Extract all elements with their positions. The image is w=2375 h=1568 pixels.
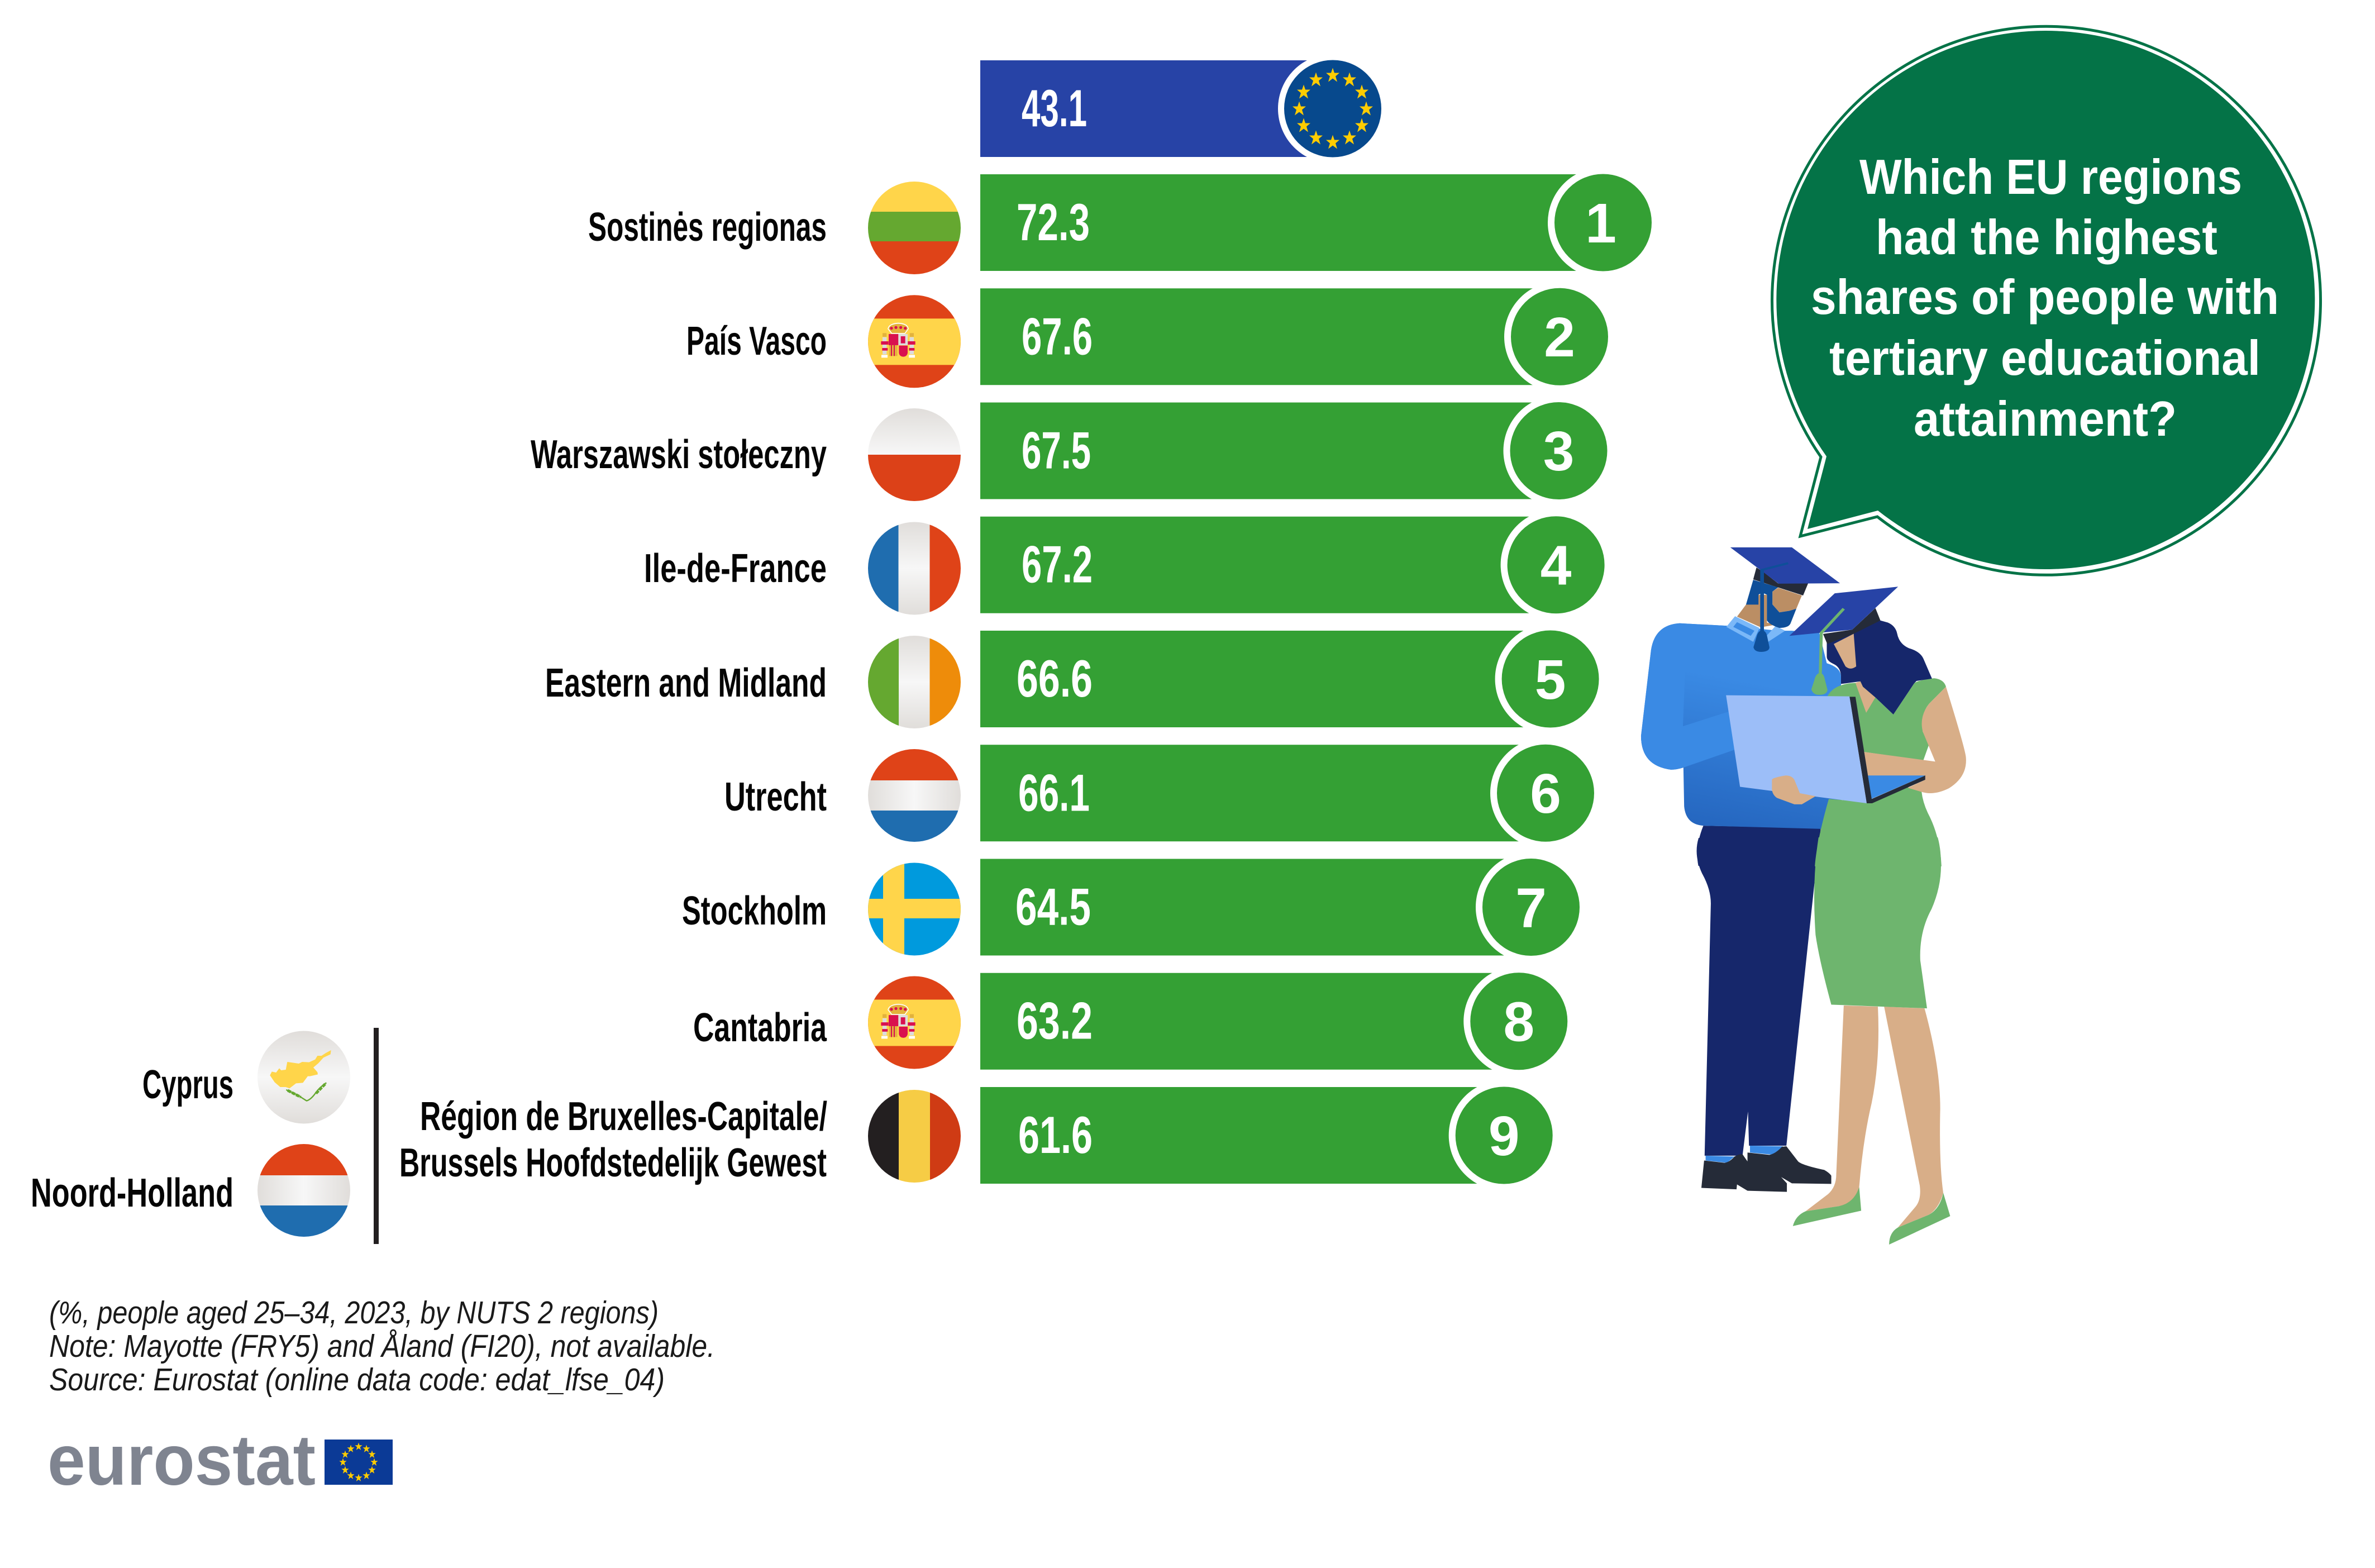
icon: EU flag <box>325 1440 393 1485</box>
rank badge <box>1449 1080 1560 1192</box>
label: Ile-de-France <box>644 546 827 591</box>
label: Brussels Hoofdstedelijk Gewest <box>399 1141 827 1185</box>
rank badge <box>1463 966 1575 1078</box>
footnotes: (%, people aged 25–34, 2023, by NUTS 2 regions) <box>49 1295 659 1331</box>
footnotes <box>49 1295 715 1398</box>
flag: Ireland <box>867 635 962 729</box>
bubble fill <box>1776 31 2315 569</box>
flag: Cyprus <box>257 1031 350 1124</box>
flag: Lithuania <box>867 181 961 275</box>
rank badge <box>1504 282 1615 393</box>
value: 63.2 <box>1017 991 1093 1050</box>
man: trousers and shoes <box>1697 826 1832 1192</box>
question text <box>1811 149 2279 446</box>
man: upper body and head <box>1641 547 1842 829</box>
label: Sostinės regionas <box>588 205 827 250</box>
illustration: two graduates with a laptop <box>1641 547 1966 1245</box>
flag: Belgium <box>867 1089 961 1183</box>
row 3: Warszawski stołeczny <box>531 402 1608 501</box>
rank badge: 5 <box>1535 649 1566 711</box>
speech bubble <box>1772 26 2321 575</box>
row 8: Cantabria <box>694 973 1567 1070</box>
rank badge <box>1501 509 1612 621</box>
divider line <box>374 1028 379 1244</box>
value: 64.5 <box>1015 877 1091 936</box>
label: País Vasco <box>686 319 827 364</box>
label: Eastern and Midland <box>545 661 827 706</box>
eurostat logo: eurostat <box>47 1421 316 1500</box>
rank badge: 1 <box>1585 192 1616 255</box>
bubble outline <box>1772 26 2321 575</box>
laptop and hand <box>1726 695 1925 804</box>
question text: Which EU regions <box>1859 149 2242 204</box>
label: Noord-Holland: Noord-Holland <box>31 1171 233 1216</box>
label: Warszawski stołeczny <box>531 432 827 477</box>
rank badge: 9 <box>1489 1105 1520 1167</box>
rank badge <box>1495 623 1606 735</box>
bar <box>980 402 1558 499</box>
tied regions: Cyprus and Noord-Holland <box>31 1028 379 1244</box>
flag: Netherlands <box>867 749 961 842</box>
question text: tertiary educational <box>1829 330 2260 385</box>
EU bar <box>980 60 1333 157</box>
row 7: Stockholm <box>683 859 1580 956</box>
flag: Spain <box>867 294 961 388</box>
icon: EU flag circle <box>1278 54 1394 163</box>
row 5: Eastern and Midland <box>547 630 1599 728</box>
label: Région de Bruxelles-Capitale/ <box>420 1094 827 1139</box>
rank badge <box>1476 852 1587 964</box>
value: 67.5 <box>1022 421 1091 479</box>
value: 66.6 <box>1017 649 1093 708</box>
value: 67.6 <box>1022 307 1093 365</box>
rank badge: 6 <box>1530 762 1561 825</box>
rank badge: 3 <box>1543 420 1574 483</box>
rank badge: 8 <box>1503 991 1534 1054</box>
question text: attainment? <box>1914 391 2177 446</box>
label <box>399 1094 827 1185</box>
rank badge <box>1548 168 1659 279</box>
value: 67.2 <box>1022 535 1093 593</box>
label: Stockholm <box>682 889 827 933</box>
bar <box>980 631 1550 727</box>
woman: dress and legs <box>1793 678 1950 1245</box>
bar <box>980 1087 1504 1184</box>
flag: Netherlands <box>257 1143 351 1237</box>
rank badge: 7 <box>1515 877 1547 940</box>
flag: Sweden <box>867 862 961 956</box>
bar <box>980 174 1603 271</box>
footnotes: Note: Mayotte (FRY5) and Åland (FI20), not available. <box>49 1328 715 1364</box>
question text: had the highest <box>1876 209 2217 265</box>
row 1: Sostinės regionas <box>589 174 1652 274</box>
label: Cyprus: Cyprus <box>142 1062 233 1107</box>
value: 66.1 <box>1018 763 1090 822</box>
bar <box>980 973 1519 1070</box>
flag: Poland <box>867 408 961 502</box>
rank badge <box>1504 395 1614 507</box>
rank badge: 2 <box>1544 306 1575 369</box>
value: 72.3 <box>1017 193 1090 251</box>
flag: France <box>867 522 962 616</box>
row 9: Région de Bruxelles-Capitale <box>401 1087 1553 1185</box>
row 6: Utrecht <box>726 744 1594 842</box>
EU bar row <box>980 54 1394 163</box>
rank badge <box>1490 737 1601 849</box>
row 2: País Vasco <box>688 288 1608 388</box>
value: 61.6 <box>1018 1105 1093 1164</box>
EU value: 43.1 <box>1022 79 1087 137</box>
label: Cantabria <box>693 1005 827 1050</box>
row 4: Ile-de-France <box>646 516 1605 614</box>
label: Utrecht <box>724 775 827 819</box>
woman: head, hair and arm <box>1790 587 1966 793</box>
question text: shares of people with <box>1811 269 2279 325</box>
bar <box>980 745 1546 841</box>
bar <box>980 859 1531 955</box>
rank badge: 4 <box>1541 534 1572 597</box>
footnotes: Source: Eurostat (online data code: edat_lfse_04) <box>49 1362 665 1398</box>
bar <box>980 517 1556 613</box>
flag: Spain <box>867 975 961 1069</box>
bar <box>980 288 1560 385</box>
